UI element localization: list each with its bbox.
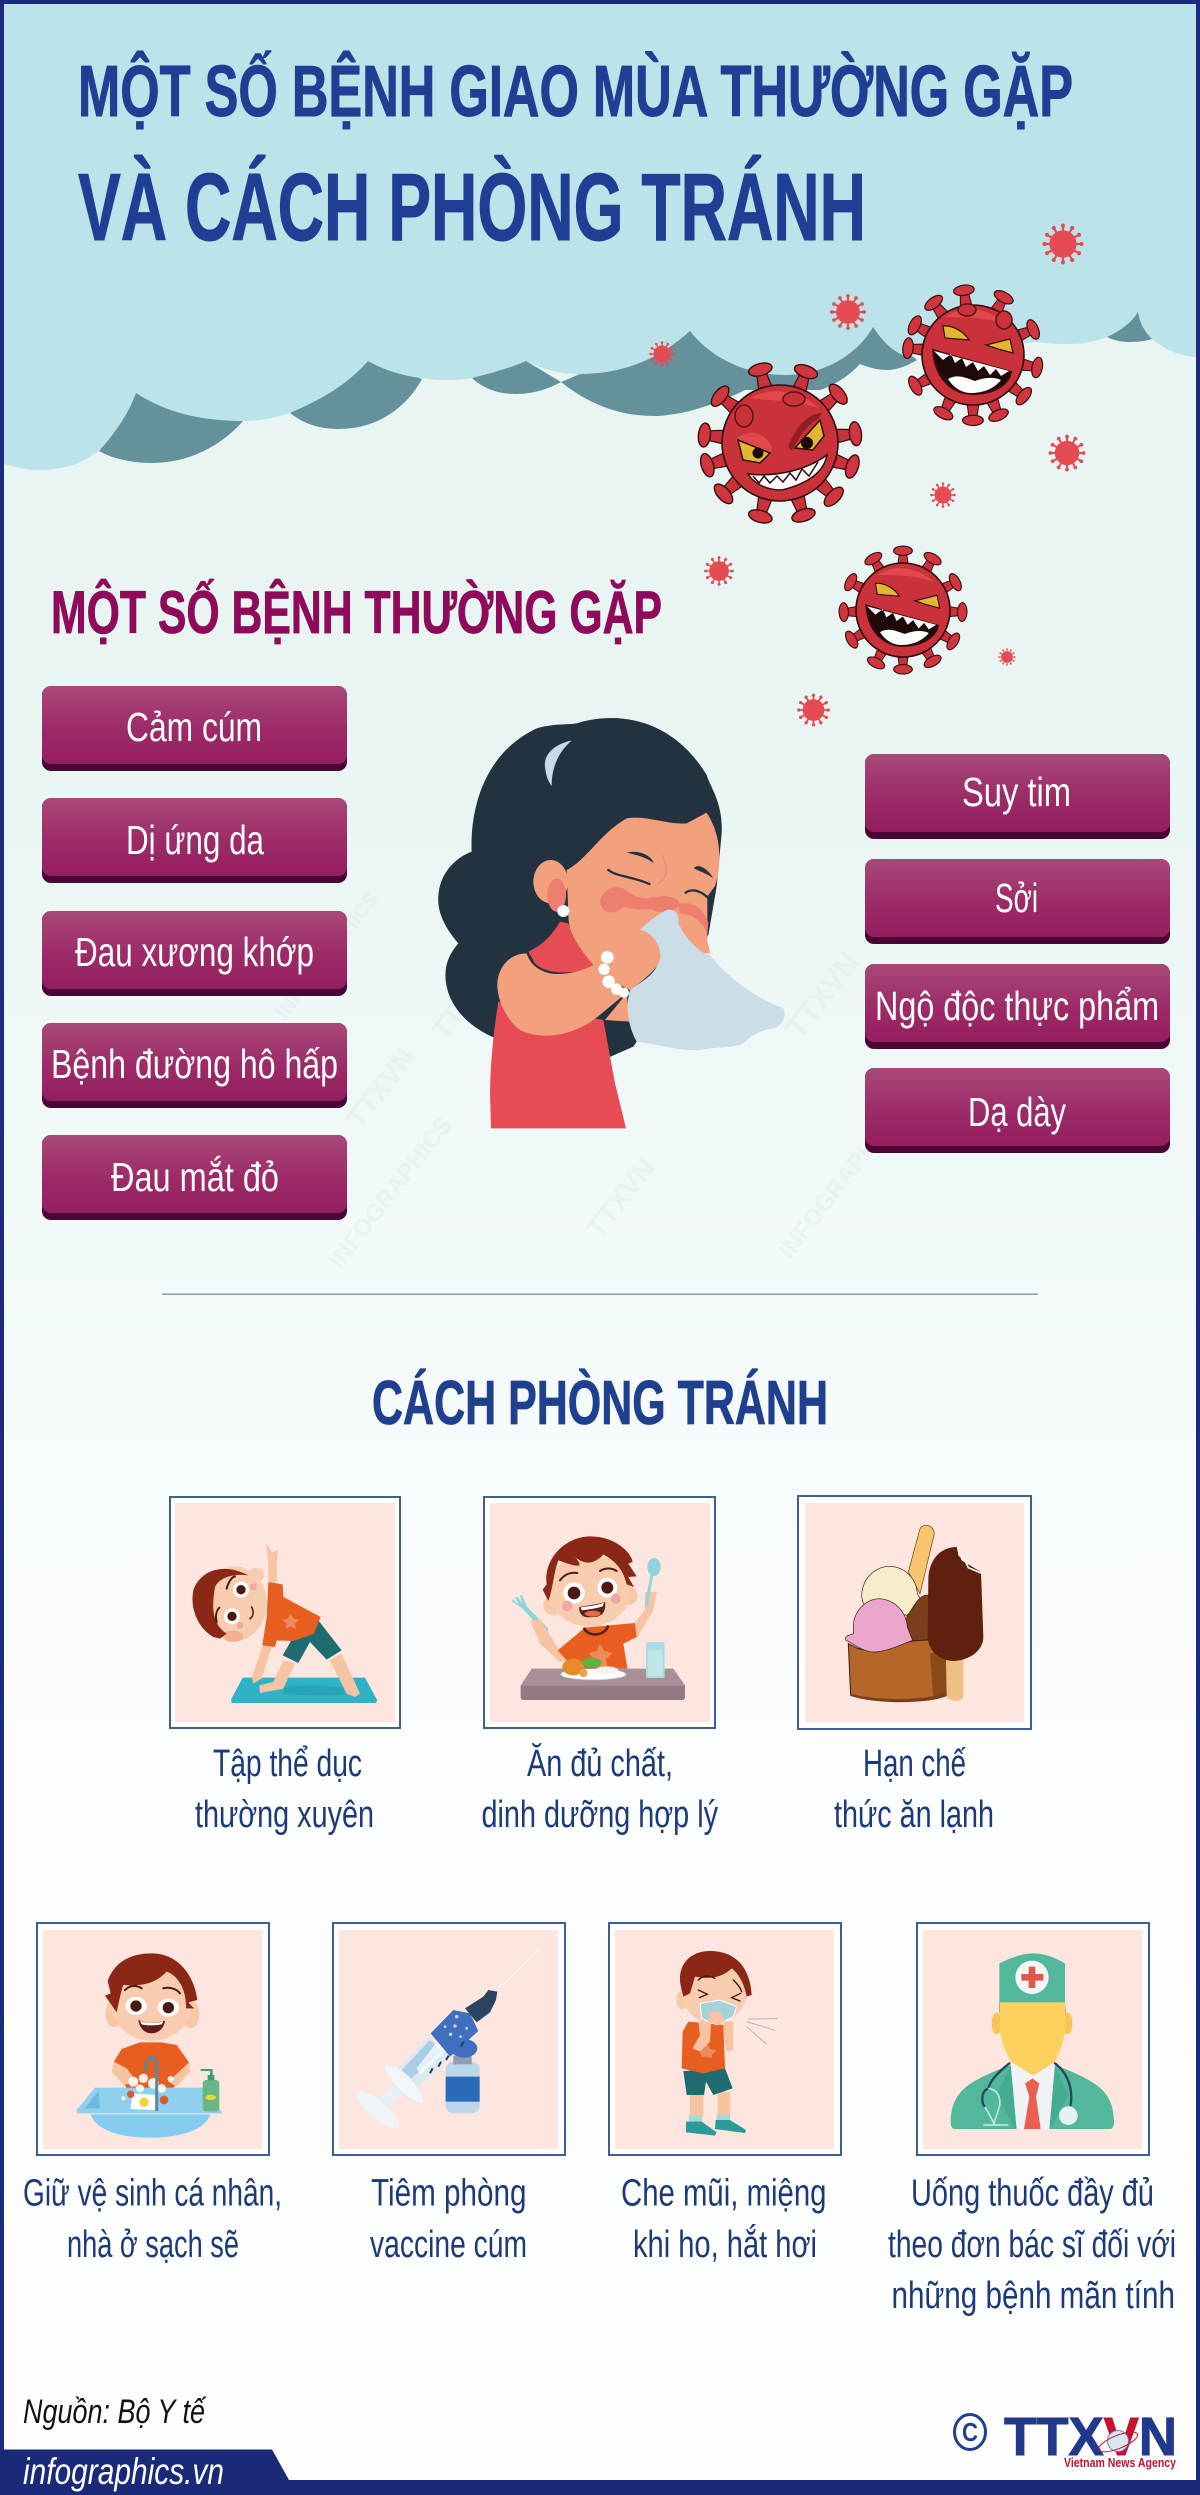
caption: cough: khi ho, hắt hơi bbox=[633, 2223, 817, 2266]
divider bbox=[162, 1294, 1038, 1295]
icon: child eating bbox=[511, 1536, 685, 1700]
watermarks: TTXVN bbox=[580, 1152, 661, 1244]
logo: TTXVN: C bbox=[962, 2417, 978, 2447]
icon: child exercising bbox=[192, 1543, 377, 1703]
caption: vaccine: Tiêm phòng bbox=[371, 2172, 526, 2214]
panel: hygiene card bbox=[37, 1923, 269, 2155]
panel: vaccine card bbox=[333, 1923, 565, 2155]
caption: exercise: thường xuyên bbox=[195, 1794, 374, 1836]
logo: TTXVN: TTXVN bbox=[1004, 2407, 1177, 2467]
icon: large virus right bbox=[902, 284, 1044, 426]
caption: doctor bbox=[888, 2172, 1176, 2317]
watermarks: TTXVN bbox=[426, 958, 502, 1044]
icon: ice cream bbox=[846, 1525, 983, 1702]
button: Cảm cúm: Cảm cúm bbox=[126, 704, 262, 750]
button: Dị ứng da bbox=[42, 798, 347, 883]
caption: cold food: thức ăn lạnh bbox=[834, 1794, 994, 1836]
panel: diseases left column bbox=[42, 686, 347, 1220]
icon: doctor bbox=[951, 1953, 1114, 2129]
caption: exercise bbox=[195, 1743, 374, 1836]
button: Sởi: Sởi bbox=[995, 875, 1038, 921]
button: Đau xương khớp bbox=[42, 911, 347, 996]
button: Cảm cúm bbox=[42, 686, 347, 771]
watermarks: TTXVN bbox=[780, 946, 866, 1044]
caption: nutrition bbox=[482, 1742, 718, 1836]
caption: nutrition: dinh dưỡng hợp lý bbox=[482, 1794, 718, 1836]
caption: exercise: Tập thể dục bbox=[213, 1743, 362, 1785]
watermarks: INFOGRAPHICS bbox=[323, 1112, 458, 1274]
icon: child washing hands bbox=[77, 1953, 223, 2138]
button: Dạ dày bbox=[865, 1068, 1170, 1153]
caption: nutrition: Ăn đủ chất, bbox=[527, 1742, 673, 1785]
caption: vaccine: vaccine cúm bbox=[370, 2224, 527, 2266]
icon: syringe and vial bbox=[352, 1949, 538, 2134]
button: Ngộ độc thực phẩm bbox=[865, 964, 1170, 1049]
watermarks: INFOGRAPHICS bbox=[272, 889, 383, 1023]
button: Sởi bbox=[865, 859, 1170, 944]
panel: exercise card bbox=[170, 1497, 400, 1728]
logo: TTXVN: Vietnam News Agency bbox=[1064, 2455, 1177, 2470]
panel: cough card bbox=[609, 1923, 841, 2155]
watermarks bbox=[272, 882, 908, 1274]
footer bar bbox=[0, 2450, 1200, 2495]
caption: cold food bbox=[834, 1743, 994, 1836]
button: Dạ dày: Dạ dày bbox=[968, 1089, 1066, 1135]
button: Bệnh đường hô hấp: Bệnh đường hô hấp bbox=[51, 1041, 338, 1087]
cloud shadow bbox=[99, 312, 1152, 463]
icon: large virus left bbox=[697, 361, 863, 525]
title bbox=[78, 50, 1073, 261]
caption: hygiene: Giữ vệ sinh cá nhân, bbox=[23, 2172, 282, 2214]
footer site: infographics.vn bbox=[23, 2451, 224, 2492]
sky cloud bbox=[0, 0, 1200, 470]
button: Dị ứng da: Dị ứng da bbox=[126, 817, 264, 863]
source note: Nguồn: Bộ Y tế bbox=[23, 2393, 207, 2431]
caption: cough: Che mũi, miệng bbox=[621, 2172, 826, 2214]
watermarks: TTXVN bbox=[340, 1042, 421, 1134]
button: Đau mắt đỏ: Đau mắt đỏ bbox=[111, 1154, 279, 1200]
watermarks: INFOGRAPHICS bbox=[773, 1102, 908, 1264]
icon: child coughing with mask bbox=[676, 1951, 777, 2136]
icon: large virus lower bbox=[839, 546, 967, 674]
button: Suy tim bbox=[865, 754, 1170, 839]
small virus particles bbox=[650, 226, 1084, 725]
caption: hygiene bbox=[23, 2172, 282, 2266]
button: Bệnh đường hô hấp bbox=[42, 1023, 347, 1108]
watermarks: INFOGRAPHICS bbox=[568, 882, 703, 1044]
heading: common diseases: MỘT SỐ BỆNH THƯỜNG GẶP bbox=[51, 579, 662, 646]
caption: cold food: Hạn chế bbox=[863, 1743, 966, 1785]
caption: vaccine bbox=[370, 2172, 527, 2266]
button: Đau xương khớp: Đau xương khớp bbox=[75, 929, 314, 975]
button: Đau mắt đỏ bbox=[42, 1135, 347, 1220]
heading: prevention: CÁCH PHÒNG TRÁNH bbox=[372, 1369, 828, 1438]
button: Suy tim: Suy tim bbox=[962, 769, 1071, 815]
caption: hygiene: nhà ở sạch sẽ bbox=[67, 2224, 239, 2266]
panel: cold food card bbox=[798, 1496, 1031, 1729]
caption: cough bbox=[621, 2172, 826, 2266]
panel: nutrition card bbox=[484, 1497, 715, 1728]
panel: diseases right column bbox=[865, 754, 1170, 1153]
illustration: woman sneezing bbox=[438, 718, 785, 1128]
panel: doctor card bbox=[917, 1923, 1149, 2155]
